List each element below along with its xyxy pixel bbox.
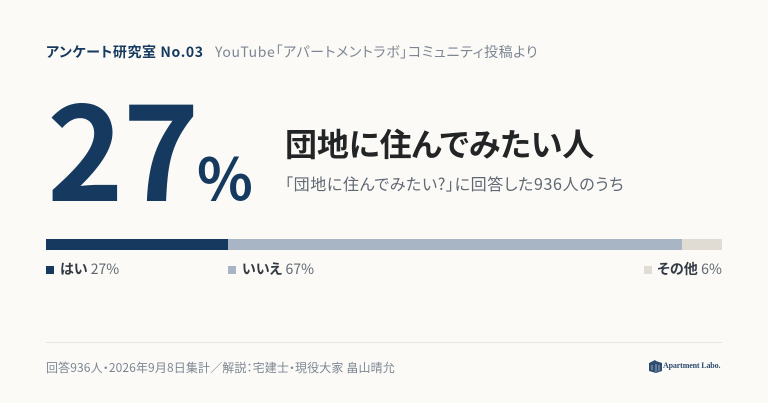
percent sign: % [197,133,253,217]
swatch [46,266,54,274]
legend: no [228,259,314,279]
legend: yes [46,259,119,279]
label: はい 27% [60,259,119,279]
icon: building [649,360,662,373]
segment: no 67% [228,239,682,250]
header label: アンケート研究室 No.03 [46,42,204,62]
big number: 27 [47,51,198,239]
header source: YouTube「アパートメントラボ」コミュニティ投稿より [215,42,538,62]
logo text: Apartment Labo. [663,361,720,370]
legend: other [644,259,722,279]
swatch [644,266,652,274]
stacked bar [46,239,722,250]
label: いいえ 67% [242,259,314,279]
logo [649,360,720,373]
footer credit: 回答936人・2026年9月8日集計／解説：宅建士・現役大家 畠山晴允 [46,359,395,376]
subheading: 「団地に住んでみたい?」に回答した936人のうち [285,171,624,195]
swatch [228,266,236,274]
label: その他 6% [657,259,722,279]
segment: yes 27% [46,239,228,250]
segment: other 6% [682,239,722,250]
headline: 団地に住んでみたい人 [285,120,594,166]
